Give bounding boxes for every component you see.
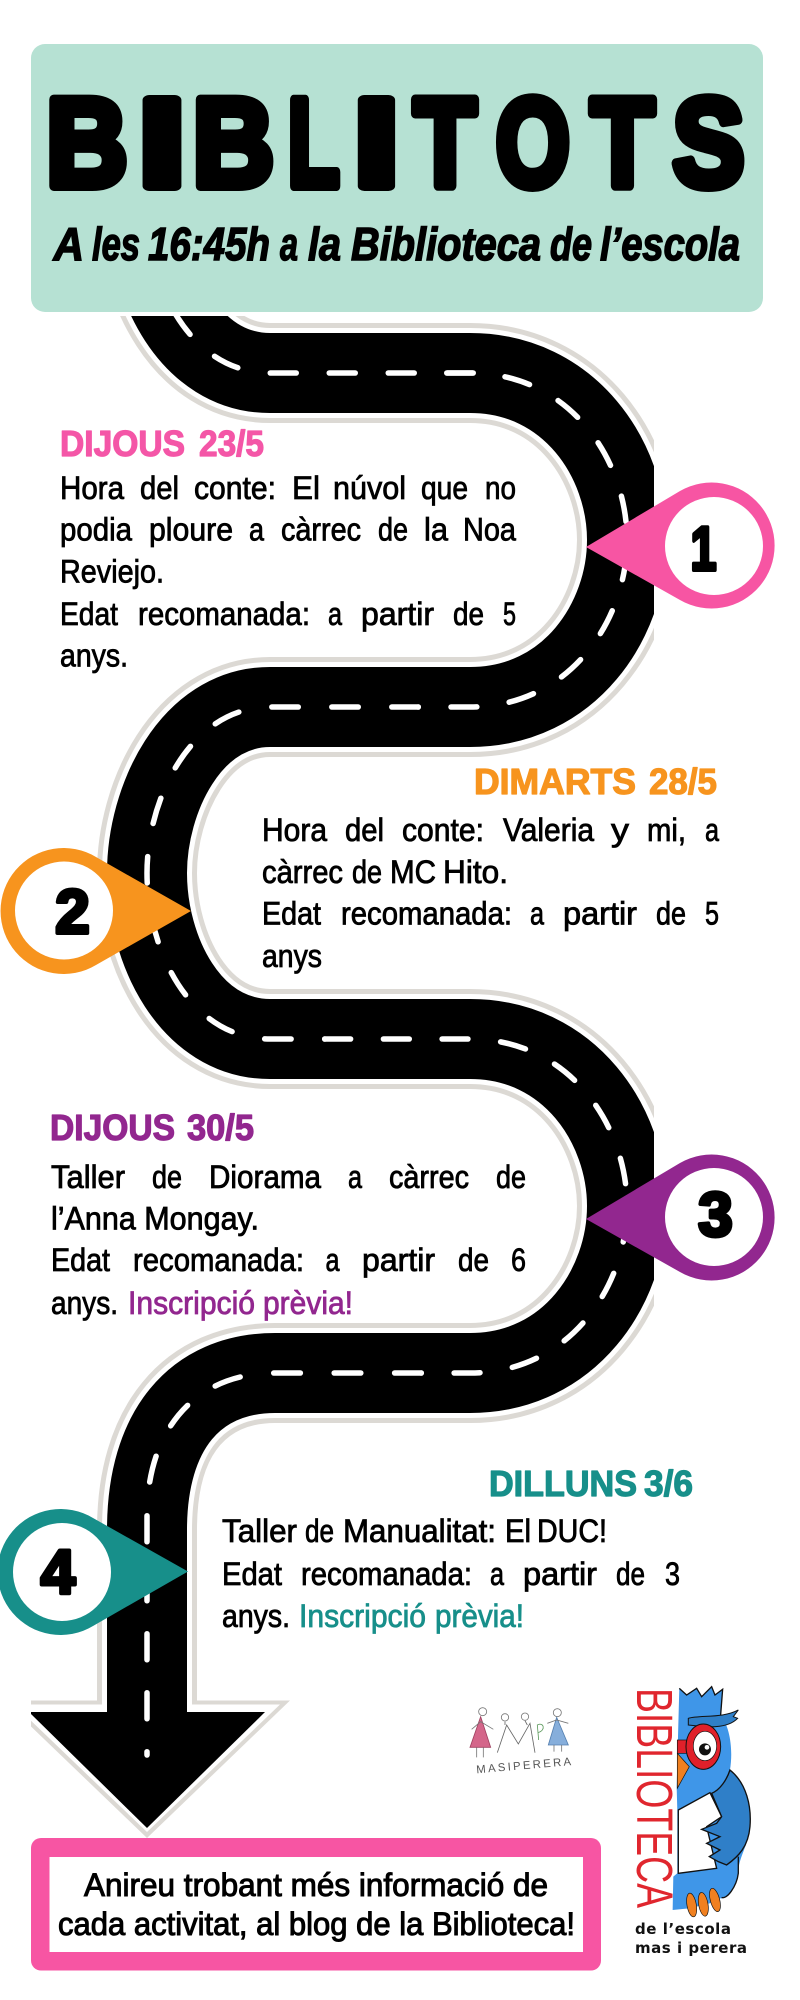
heading: Dijous 30/5: 30/5 xyxy=(187,1107,254,1148)
title: O xyxy=(496,74,570,213)
description: de xyxy=(152,1159,182,1195)
description: recomanada: xyxy=(138,596,310,632)
logo text: de l'escola mas i perera: de l’escola xyxy=(635,1920,731,1938)
logo text: de l'escola mas i perera xyxy=(635,1920,747,1957)
description: que xyxy=(421,470,468,506)
description: y xyxy=(611,812,629,848)
icon: pin 4: 4 xyxy=(41,1538,76,1607)
title: T xyxy=(414,74,476,213)
description: conte: xyxy=(402,812,484,848)
description: ploure xyxy=(149,512,233,548)
description: DUC! xyxy=(537,1513,607,1549)
description: del xyxy=(345,812,384,848)
text block: event 4 xyxy=(222,1463,693,1634)
description: càrrec xyxy=(389,1159,469,1195)
callout text xyxy=(58,1867,575,1942)
description: anys xyxy=(262,938,322,974)
icon: pin 3: 3 xyxy=(698,1181,733,1250)
description: El xyxy=(292,470,320,506)
logo: library owl xyxy=(626,1687,750,1957)
logo text: Biblioteca: BIBLIOTECA xyxy=(626,1688,683,1908)
icon: pin 4 xyxy=(0,1509,188,1635)
heading: Dilluns 3/6: 3/6 xyxy=(644,1463,693,1504)
description: de xyxy=(305,1513,334,1549)
description: de xyxy=(378,512,408,548)
description: partir xyxy=(361,596,434,632)
description: Edat xyxy=(60,596,118,632)
subtitle: les xyxy=(92,218,140,270)
description: MC xyxy=(390,854,436,890)
title: I xyxy=(138,74,186,213)
description: Inscripció xyxy=(128,1285,255,1321)
description: recomanada: xyxy=(341,896,512,932)
description: Edat xyxy=(262,896,321,932)
callout: blog information xyxy=(31,1838,601,1970)
description: la xyxy=(424,512,448,548)
description: 5 xyxy=(705,896,719,932)
description: recomanada: xyxy=(301,1556,472,1592)
description: Hora xyxy=(60,470,124,506)
description: càrrec xyxy=(262,854,343,890)
description: 3 xyxy=(665,1556,680,1592)
description: conte: xyxy=(194,470,276,506)
description: càrrec xyxy=(281,512,361,548)
text block: event 2 xyxy=(262,761,719,974)
logo text: de l'escola mas i perera: mas i perera xyxy=(635,1939,747,1957)
description: Hora xyxy=(262,812,327,848)
description: de xyxy=(352,854,382,890)
description: 5 xyxy=(503,596,516,632)
description: no xyxy=(485,470,516,506)
icon: pin 2 xyxy=(1,848,191,974)
subtitle: a xyxy=(280,218,298,270)
description xyxy=(60,470,516,674)
description: anys. xyxy=(51,1285,118,1321)
heading: Dimarts 28/5: 28/5 xyxy=(649,761,717,802)
description: partir xyxy=(362,1242,435,1278)
description: de xyxy=(496,1159,526,1195)
title: I xyxy=(353,74,400,213)
subtitle: l’escola xyxy=(600,218,740,270)
icon: pin 2: 2 xyxy=(55,878,90,947)
description: podia xyxy=(60,512,132,548)
icon: pin 1: 1 xyxy=(690,515,716,584)
text block: event 3 xyxy=(50,1107,526,1321)
description: 6 xyxy=(511,1242,526,1278)
description: Noa xyxy=(463,512,516,548)
icon: owl xyxy=(673,1687,750,1918)
description: a xyxy=(326,1242,340,1278)
subtitle: de xyxy=(550,218,592,270)
icon: pin 3 xyxy=(586,1154,775,1280)
description: anys. xyxy=(222,1598,290,1634)
description: Reviejo. xyxy=(60,554,164,590)
description xyxy=(222,1513,680,1634)
description xyxy=(262,812,719,974)
logo: AMPA Mas i Perera drawing xyxy=(470,1708,572,1776)
description: mi, xyxy=(647,812,686,848)
description: partir xyxy=(523,1556,597,1592)
description: de xyxy=(458,1242,489,1278)
description: prèvia! xyxy=(263,1285,353,1321)
description: Diorama xyxy=(209,1159,321,1195)
description: a xyxy=(530,896,544,932)
description: Manualitat: xyxy=(343,1513,496,1549)
description: del xyxy=(140,470,179,506)
description: El xyxy=(505,1513,531,1549)
title: T xyxy=(591,74,654,213)
title: L xyxy=(288,74,340,213)
description: a xyxy=(328,596,342,632)
heading: Dijous 23/5: 23/5 xyxy=(199,423,264,464)
description: Taller xyxy=(51,1159,125,1195)
text block: event 1 xyxy=(60,423,516,674)
description: partir xyxy=(563,896,637,932)
callout text: Anireu trobant més informació de xyxy=(84,1867,548,1903)
description: prèvia! xyxy=(435,1598,524,1634)
description: Edat xyxy=(222,1556,282,1592)
icon: pin 1 xyxy=(586,483,775,608)
subtitle: la xyxy=(308,218,341,270)
description: Hito. xyxy=(443,854,508,890)
logo: AMPA Mas i Perera drawing: MASIPERERA xyxy=(476,1756,572,1776)
heading: Dilluns 3/6: DILLUNS xyxy=(489,1463,637,1504)
description: Edat xyxy=(51,1242,110,1278)
road with arrow xyxy=(4,207,627,1838)
heading: Dimarts 28/5: DIMARTS xyxy=(474,761,636,802)
title: B xyxy=(46,74,128,213)
description: Inscripció xyxy=(299,1598,426,1634)
title: S xyxy=(673,74,744,213)
subtitle: 16:45h xyxy=(148,218,270,270)
description: a xyxy=(249,512,264,548)
description: Taller xyxy=(222,1513,297,1549)
description: a xyxy=(705,812,719,848)
subtitle: Biblioteca xyxy=(351,218,541,270)
description: a xyxy=(348,1159,362,1195)
description xyxy=(51,1159,526,1321)
description: a xyxy=(490,1556,504,1592)
subtitle: A xyxy=(53,218,82,270)
header panel xyxy=(31,44,763,312)
heading: Dijous 23/5: DIJOUS xyxy=(60,423,185,464)
description: núvol xyxy=(333,470,406,506)
description: de xyxy=(616,1556,645,1592)
description: l’Anna Mongay. xyxy=(51,1200,259,1236)
title: B xyxy=(193,74,274,213)
heading: Dijous 30/5: DIJOUS xyxy=(50,1107,175,1148)
description: de xyxy=(656,896,686,932)
description: de xyxy=(453,596,484,632)
callout text: cada activitat, al blog de la Biblioteca! xyxy=(58,1906,575,1942)
description: Valeria xyxy=(503,812,594,848)
description: recomanada: xyxy=(133,1242,304,1278)
description: anys. xyxy=(60,638,128,674)
